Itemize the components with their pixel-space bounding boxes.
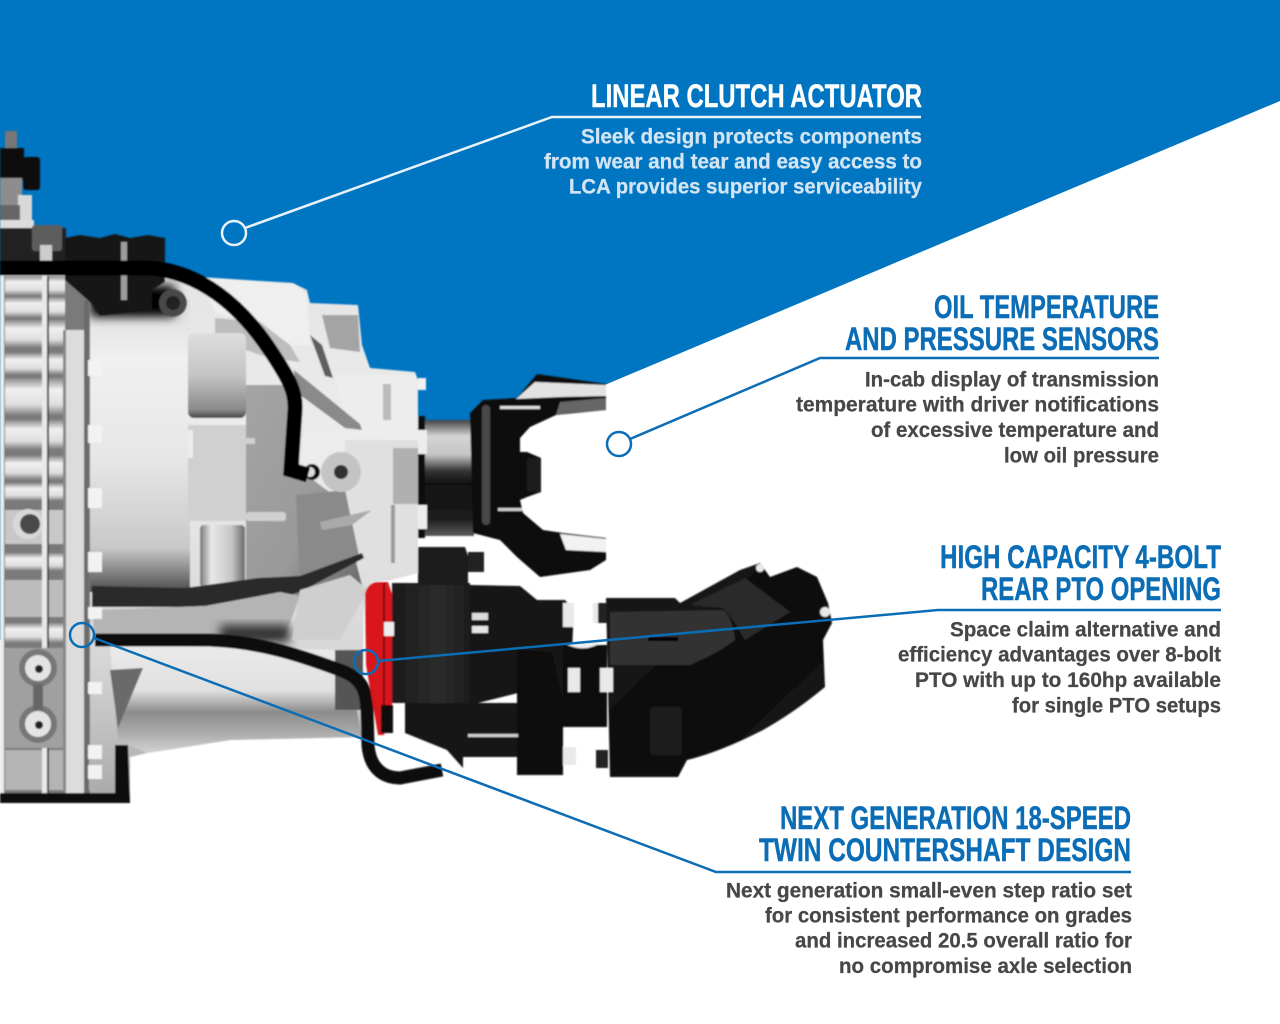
background: blue diagonal panel: [0, 0, 1280, 640]
description: for single PTO setups: [1012, 694, 1221, 718]
lower sump: [110, 645, 362, 753]
description: temperature with driver notifications: [796, 394, 1159, 416]
bolts: [88, 360, 426, 779]
top sensors and fittings: [0, 131, 66, 264]
callout: oil temperature and pressure sensors: [607, 289, 1159, 468]
heading: [940, 539, 1221, 607]
output yoke: [418, 374, 606, 577]
left column bands: [0, 276, 90, 796]
description: Next generation small-even step ratio set: [726, 880, 1132, 902]
dark band above rib: [92, 553, 364, 607]
description: and increased 20.5 overall ratio for: [795, 930, 1132, 952]
sloped lower rib: [92, 592, 300, 642]
description: no compromise axle selection: [839, 955, 1132, 978]
hydraulic pump elbow: [606, 563, 832, 777]
PTO housing: [381, 547, 574, 775]
top black clip block: [65, 234, 165, 316]
callout: linear clutch actuator: [222, 78, 922, 245]
rear flange plate: [345, 440, 418, 572]
transmission illustration: [0, 131, 832, 803]
black hydraulic tube upper: [0, 268, 308, 475]
heading: AND PRESSURE SENSORS: [845, 321, 1159, 357]
heading: LINEAR CLUTCH ACTUATOR: [591, 78, 922, 114]
leader line and marker: [607, 358, 1159, 456]
center casing side: [90, 300, 190, 592]
description: low oil pressure: [1004, 444, 1159, 468]
heading: OIL TEMPERATURE: [934, 289, 1159, 325]
description: efficiency advantages over 8-bolt: [898, 644, 1221, 666]
callout: next generation 18-speed twin countershaft design: [70, 623, 1132, 978]
description: of excessive temperature and: [871, 419, 1159, 442]
mid grey web: [246, 385, 362, 598]
heading: [759, 800, 1131, 868]
description: from wear and tear and easy access to: [544, 150, 922, 174]
description: [544, 126, 922, 198]
description: LCA provides superior serviceability: [569, 176, 922, 198]
heading: NEXT GENERATION 18-SPEED: [780, 800, 1131, 836]
ports: [13, 509, 43, 539]
dark shadow under top block: [90, 285, 175, 317]
heading: [845, 289, 1159, 357]
center shoulder lobes: [188, 333, 246, 418]
gusset rib: [294, 370, 362, 430]
description: [796, 368, 1159, 468]
connector bolts: [563, 564, 830, 768]
description: for consistent performance on grades: [765, 904, 1132, 928]
black hydraulic tube lower: [95, 640, 442, 778]
description: Sleek design protects components: [581, 126, 922, 148]
description: Space claim alternative and: [950, 618, 1221, 642]
description: In-cab display of transmission: [865, 368, 1159, 392]
main silver casing: [0, 262, 426, 796]
leader line and marker: [70, 623, 1131, 872]
leader line and marker: [222, 117, 921, 245]
red PTO flange: [365, 582, 394, 735]
description: [898, 618, 1221, 718]
center bracket tabs: [195, 438, 255, 444]
upper right housing: [200, 277, 310, 345]
description: PTO with up to 160hp available: [915, 669, 1221, 692]
plug and boss: [159, 289, 187, 317]
callout: high capacity 4-bolt rear PTO opening: [354, 539, 1221, 718]
heading: TWIN COUNTERSHAFT DESIGN: [759, 832, 1131, 868]
description: [726, 880, 1132, 978]
PTO connector: [563, 645, 607, 727]
leader line and marker: [354, 610, 1221, 674]
black mounting bracket: [0, 745, 130, 803]
